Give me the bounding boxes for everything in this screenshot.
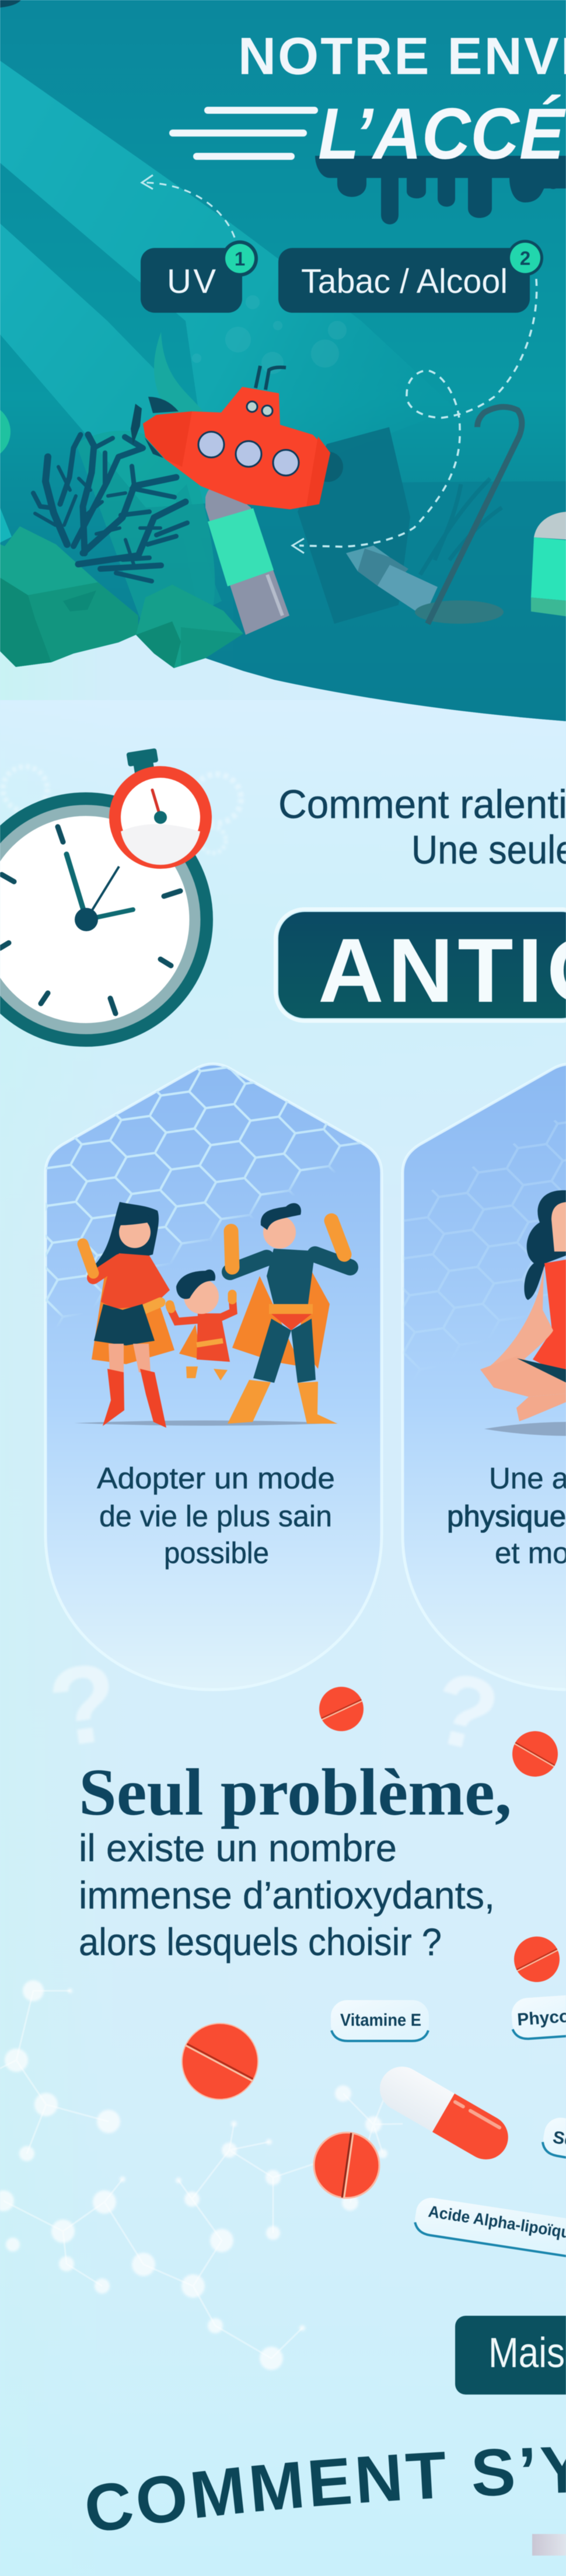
faded seaweed bbox=[420, 478, 502, 575]
heading: comment ralentir bbox=[278, 782, 566, 872]
body text: antioxydants: alors lesquels choisir ? bbox=[79, 1920, 442, 1963]
icon: faint gears bbox=[3, 767, 241, 853]
tag: UV: UV bbox=[167, 263, 216, 300]
label: Vitamine E: Vitamine E bbox=[340, 2011, 421, 2030]
icon: capsule bbox=[372, 2058, 516, 2168]
can bbox=[531, 512, 566, 617]
hull bbox=[143, 387, 330, 509]
kelp bbox=[76, 332, 222, 618]
card text: physique bbox=[447, 1500, 566, 1533]
tag: UV bbox=[141, 240, 258, 313]
card text bbox=[447, 1462, 566, 1570]
label: Vitamine E bbox=[331, 2000, 429, 2041]
label: Phycocyanine bbox=[511, 1992, 566, 2040]
seabed shade bbox=[233, 481, 566, 721]
rock right bbox=[136, 585, 243, 668]
card text: Adopter un mode bbox=[97, 1462, 335, 1495]
dark sunken box bbox=[298, 427, 410, 624]
yoga woman bbox=[480, 1190, 566, 1421]
icon: tablet middle bbox=[310, 2128, 383, 2202]
icon: question marks bbox=[41, 1639, 509, 1775]
hexagon mesh faint bbox=[404, 1120, 566, 1334]
light rays bbox=[0, 61, 455, 543]
periscope bbox=[256, 366, 286, 390]
icon: question marks: ? bbox=[41, 1639, 126, 1771]
tag: Tabac / Alcool: 2 bbox=[520, 247, 530, 269]
fin and propeller bbox=[131, 397, 179, 458]
heading: seul probleme: Seul problème, bbox=[79, 1755, 512, 1829]
molecule network bbox=[0, 1980, 403, 2370]
icon: tablet right lower bbox=[506, 1929, 566, 1990]
icon: clock bbox=[0, 799, 207, 1040]
tag: UV: 1 bbox=[235, 248, 245, 270]
ground shadow bbox=[74, 1420, 339, 1426]
arrow: dashed tabac path bbox=[292, 279, 537, 553]
icon: stopwatch bbox=[115, 748, 206, 865]
title drip shadow bbox=[315, 156, 566, 224]
speed lines bbox=[169, 107, 318, 160]
panel: card physical activity bbox=[398, 1064, 566, 1690]
panel: underwater hero bbox=[0, 0, 566, 721]
superhero father bbox=[228, 1203, 350, 1424]
title line 1: NOTRE ENVI bbox=[238, 27, 566, 86]
superhero mother bbox=[83, 1202, 174, 1428]
body text: antioxydants: immense d’antioxydants, bbox=[79, 1874, 495, 1917]
top corner shape bbox=[0, 0, 21, 8]
icon: question marks: ? bbox=[421, 1649, 509, 1775]
submarine bbox=[131, 366, 330, 509]
coral bbox=[33, 435, 187, 581]
icon: tablet right upper bbox=[504, 1723, 566, 1785]
plastic bottle bbox=[205, 487, 289, 635]
heading: comment ralentir: Comment ralenti bbox=[278, 782, 566, 827]
rock left bbox=[0, 526, 138, 667]
panel: card healthy lifestyle bbox=[41, 1059, 391, 1690]
arrow: dashed UV path bbox=[142, 175, 235, 237]
walking cane bbox=[415, 407, 522, 624]
ground shadow bbox=[484, 1422, 566, 1436]
faint block bottom right bbox=[532, 2534, 566, 2556]
body text: antioxydants: il existe un nombre bbox=[79, 1826, 397, 1869]
card text: possible bbox=[164, 1536, 269, 1570]
tag: Tabac / Alcool bbox=[278, 240, 543, 313]
tag: Tabac / Alcool: Tabac / Alcool bbox=[301, 263, 508, 300]
callout: mais bbox=[455, 2316, 566, 2395]
card text bbox=[97, 1462, 335, 1570]
label: Acide Alpha-lipoique bbox=[413, 2196, 566, 2261]
card text: de vie le plus sain bbox=[99, 1500, 332, 1533]
hexagon mesh bbox=[46, 1067, 362, 1320]
left green blob bbox=[0, 404, 11, 460]
body text: antioxydants bbox=[79, 1826, 495, 1963]
label: Se bbox=[541, 2115, 566, 2165]
icon: tablet large bbox=[169, 2010, 271, 2113]
bubbles bbox=[192, 295, 347, 374]
superhero child bbox=[170, 1270, 233, 1380]
water background bbox=[0, 0, 566, 721]
second bottle bbox=[346, 546, 438, 617]
icon: tablet top bbox=[312, 1680, 371, 1738]
windows bbox=[198, 401, 299, 476]
